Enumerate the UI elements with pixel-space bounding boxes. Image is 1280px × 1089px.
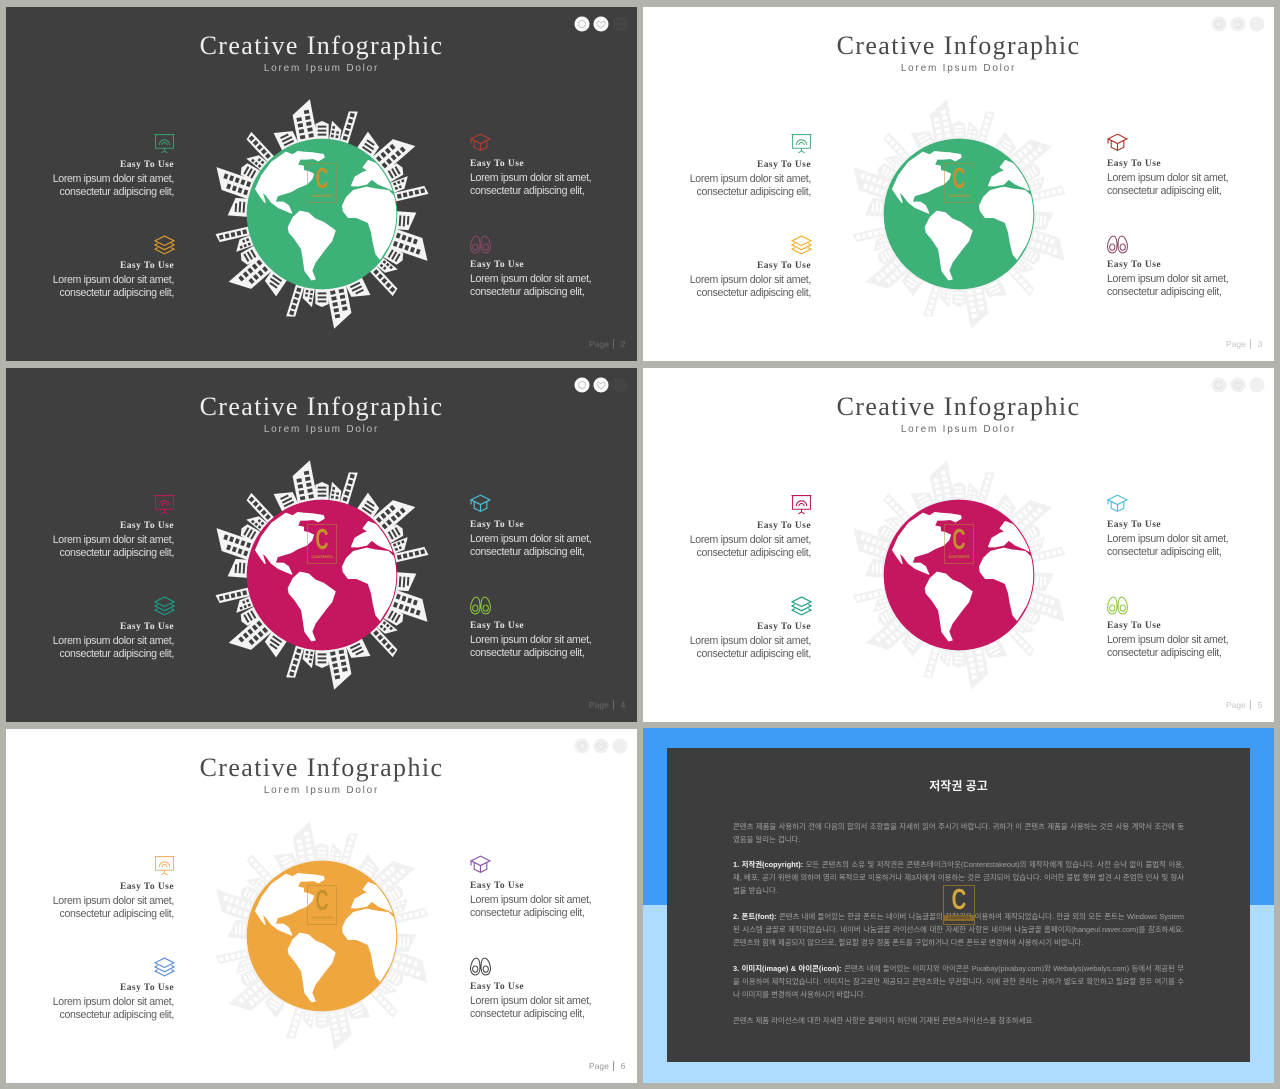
notice text lines: 였음을 알리는 겁니다. — [733, 835, 800, 844]
gold logo — [307, 524, 337, 564]
text block: top left: consectetur adipiscing elit, — [697, 186, 811, 198]
text block: top right: Easy To Use — [470, 520, 524, 530]
page number: Page 6 — [589, 1061, 625, 1071]
text block: top right: Lorem ipsum dolor sit amet, — [470, 172, 591, 184]
icon: graduation cap — [470, 494, 491, 512]
icon: layers — [154, 957, 175, 978]
text block: top right: Easy To Use — [470, 881, 524, 891]
gold logo: CONTENTS — [311, 915, 333, 920]
gold logo: C — [952, 163, 965, 195]
text block: top left: Easy To Use — [757, 160, 811, 170]
icon: graduation cap — [1107, 134, 1128, 151]
text block: top left: Easy To Use — [120, 882, 174, 892]
icon: binoculars — [1107, 595, 1128, 616]
icon: layers — [791, 235, 812, 254]
text block: top left — [24, 880, 174, 925]
text block: bottom left: consectetur adipiscing elit, — [60, 648, 174, 660]
icon: presentation board — [792, 134, 812, 154]
icon: presentation board — [154, 855, 175, 876]
text block: bottom right: Easy To Use — [470, 621, 524, 631]
text block: top left: Lorem ipsum dolor sit amet, — [690, 534, 811, 546]
gold logo — [944, 524, 974, 564]
text block: bottom right: consectetur adipiscing elit, — [470, 286, 584, 298]
gold logo: CONTENTS — [948, 554, 970, 559]
panel: white orange slide — [6, 729, 637, 1083]
panel: dark crimson slide — [6, 368, 637, 722]
gold logo: C — [315, 885, 328, 917]
text block: top right: Easy To Use — [470, 159, 524, 169]
page number: Page 5 — [1226, 700, 1262, 710]
text block: top right: consectetur adipiscing elit, — [1107, 185, 1221, 197]
globe with city ring — [216, 460, 428, 690]
text block: bottom left: consectetur adipiscing elit, — [60, 287, 174, 299]
notice text lines: 콘텐츠와 함께 제공되지 않으므로, 필요할 경우 정품 폰트를 구입하거나 다른 폰트로 변경하여 사용하시기 바랍니다. — [733, 938, 1083, 947]
text block: top right — [470, 159, 591, 197]
text block: top right: consectetur adipiscing elit, — [1107, 546, 1221, 558]
globe with city ring — [202, 816, 442, 1056]
text block: top left: Lorem ipsum dolor sit amet, — [690, 173, 811, 185]
text block: bottom left: Lorem ipsum dolor sit amet, — [53, 996, 174, 1008]
gold logo: CONTENTS — [948, 193, 970, 198]
text block: bottom right: consectetur adipiscing elit, — [470, 647, 584, 659]
subtitle: Lorem Ipsum Dolor — [264, 424, 379, 435]
gold logo — [944, 163, 974, 203]
title: Creative Infographic — [200, 31, 443, 60]
text block: top left — [690, 521, 811, 559]
text block: top right: consectetur adipiscing elit, — [470, 907, 584, 919]
text block: bottom right — [470, 980, 620, 1025]
text block: top right — [470, 879, 620, 924]
subtitle: Lorem Ipsum Dolor — [264, 63, 379, 74]
text block: top right: Lorem ipsum dolor sit amet, — [1107, 172, 1228, 184]
text block: top right — [1107, 159, 1228, 197]
notice heading: 저작권 공고 — [929, 779, 988, 793]
text block: bottom left: consectetur adipiscing elit, — [60, 1009, 174, 1021]
panel: dark green slide — [6, 7, 637, 361]
subtitle: Lorem Ipsum Dolor — [901, 63, 1016, 74]
text block: bottom right — [470, 621, 591, 659]
text block: bottom right: Easy To Use — [470, 260, 524, 270]
text block: bottom right: Lorem ipsum dolor sit amet, — [470, 634, 591, 646]
text block: top left: Easy To Use — [757, 521, 811, 531]
title: Creative Infographic — [200, 753, 443, 782]
icon: presentation board — [154, 495, 174, 514]
gold logo — [307, 163, 337, 203]
gold logo: C — [315, 524, 328, 556]
dark notice card — [667, 748, 1250, 1062]
text block: bottom right: Lorem ipsum dolor sit amet, — [470, 995, 591, 1007]
text block: bottom left: consectetur adipiscing elit, — [697, 648, 811, 660]
text block: top right: Lorem ipsum dolor sit amet, — [470, 533, 591, 545]
page number: Page 4 — [589, 700, 625, 710]
icon: graduation cap — [1107, 494, 1128, 512]
panel: white green slide — [643, 7, 1274, 361]
text block: top right: Easy To Use — [1107, 159, 1161, 169]
text block: top right — [1107, 518, 1257, 563]
text block: bottom left: consectetur adipiscing elit, — [697, 287, 811, 299]
text block: top right: Easy To Use — [1107, 520, 1161, 530]
title: Creative Infographic — [837, 392, 1080, 421]
text block: top left: consectetur adipiscing elit, — [60, 547, 174, 559]
text block: bottom right: consectetur adipiscing elit, — [470, 1008, 584, 1020]
icon: binoculars — [470, 956, 491, 977]
text block: bottom right: Easy To Use — [470, 982, 524, 992]
text block: bottom right: Lorem ipsum dolor sit amet, — [470, 273, 591, 285]
text block: bottom left: Lorem ipsum dolor sit amet, — [690, 635, 811, 647]
page number: Page 2 — [589, 339, 625, 349]
notice text lines: 벌을 받습니다. — [733, 886, 778, 895]
panel: white crimson slide — [643, 368, 1274, 722]
notice text lines: 나 이미지를 변경하여 사용하시기 바랍니다. — [733, 990, 866, 999]
text block: top left: Lorem ipsum dolor sit amet, — [53, 534, 174, 546]
text block: bottom left — [53, 622, 174, 660]
text block: top right — [470, 520, 591, 558]
text block: top right: Lorem ipsum dolor sit amet, — [470, 894, 591, 906]
text block: bottom left: Easy To Use — [120, 622, 174, 632]
notice text lines: 콘텐츠 제품 라이선스에 대한 자세한 사항은 홈페이지 하단에 기재된 콘텐츠라이선스를 참조하세요. — [733, 1016, 1034, 1025]
text block: top left: Easy To Use — [120, 521, 174, 531]
globe with city ring — [216, 99, 428, 329]
text block: top right: consectetur adipiscing elit, — [470, 185, 584, 197]
text block: top left — [53, 160, 174, 198]
text block: bottom right: consectetur adipiscing elit, — [1107, 647, 1221, 659]
social icons — [1212, 378, 1264, 392]
icon: binoculars — [470, 596, 491, 614]
globe with city ring — [852, 460, 1066, 690]
panel: copyright notice — [643, 728, 1274, 1083]
gold logo — [943, 885, 975, 925]
text block: bottom left — [690, 622, 811, 660]
text block: bottom left: Easy To Use — [757, 261, 811, 271]
icon: layers — [154, 596, 175, 616]
text block: bottom right: Easy To Use — [1107, 260, 1161, 270]
text block: bottom left: Lorem ipsum dolor sit amet, — [690, 274, 811, 286]
text block: bottom left: Lorem ipsum dolor sit amet, — [53, 274, 174, 286]
text block: bottom left — [53, 261, 174, 299]
text block: top left — [690, 160, 811, 198]
text block: bottom right: Lorem ipsum dolor sit amet, — [1107, 273, 1228, 285]
subtitle: Lorem Ipsum Dolor — [264, 785, 379, 796]
gold logo: CONTENTS — [311, 193, 333, 198]
text block: bottom left: Lorem ipsum dolor sit amet, — [53, 635, 174, 647]
globe with city ring — [852, 100, 1066, 328]
text block: bottom right — [470, 260, 591, 298]
icon: presentation board — [792, 495, 812, 514]
text block: top left — [53, 521, 174, 559]
social icons — [574, 16, 608, 32]
text block: top left: Lorem ipsum dolor sit amet, — [53, 173, 174, 185]
text block: bottom right — [1107, 619, 1257, 664]
icon: binoculars — [470, 236, 491, 254]
icon: presentation board — [154, 134, 174, 154]
gold logo: CONTENTS — [948, 915, 970, 920]
text block: top left: consectetur adipiscing elit, — [60, 908, 174, 920]
text block: top right: consectetur adipiscing elit, — [470, 546, 584, 558]
text block: top left: Easy To Use — [120, 160, 174, 170]
notice text lines — [667, 748, 1250, 1062]
subtitle: Lorem Ipsum Dolor — [901, 424, 1016, 435]
gold logo: C — [952, 524, 965, 556]
text block: top left: consectetur adipiscing elit, — [697, 547, 811, 559]
text block: bottom right: Easy To Use — [1107, 621, 1161, 631]
gold logo: CONTENTS — [311, 554, 333, 559]
gold logo: C — [315, 163, 328, 195]
social icons — [574, 378, 608, 392]
icon: layers — [154, 235, 175, 254]
page number: Page 3 — [1226, 339, 1262, 349]
title: Creative Infographic — [837, 31, 1080, 60]
icon: binoculars — [1107, 236, 1128, 254]
social icons — [573, 737, 631, 755]
text block: bottom right: consectetur adipiscing elit, — [1107, 286, 1221, 298]
text block: bottom right — [1107, 260, 1228, 298]
text block: bottom left — [24, 981, 174, 1026]
gold logo — [307, 885, 337, 925]
text block: top left: Lorem ipsum dolor sit amet, — [53, 895, 174, 907]
text block: bottom left — [690, 261, 811, 299]
text block: bottom left: Easy To Use — [120, 261, 174, 271]
title: Creative Infographic — [200, 392, 443, 421]
blue top band — [643, 728, 1274, 905]
text block: top right: Lorem ipsum dolor sit amet, — [1107, 533, 1228, 545]
icon: graduation cap — [470, 854, 491, 875]
text block: top left: consectetur adipiscing elit, — [60, 186, 174, 198]
icon: graduation cap — [470, 134, 491, 151]
social icons — [1212, 16, 1264, 32]
text block: bottom right: Lorem ipsum dolor sit amet, — [1107, 634, 1228, 646]
text block: bottom left: Easy To Use — [120, 983, 174, 993]
icon: layers — [791, 596, 812, 616]
text block: bottom left: Easy To Use — [757, 622, 811, 632]
